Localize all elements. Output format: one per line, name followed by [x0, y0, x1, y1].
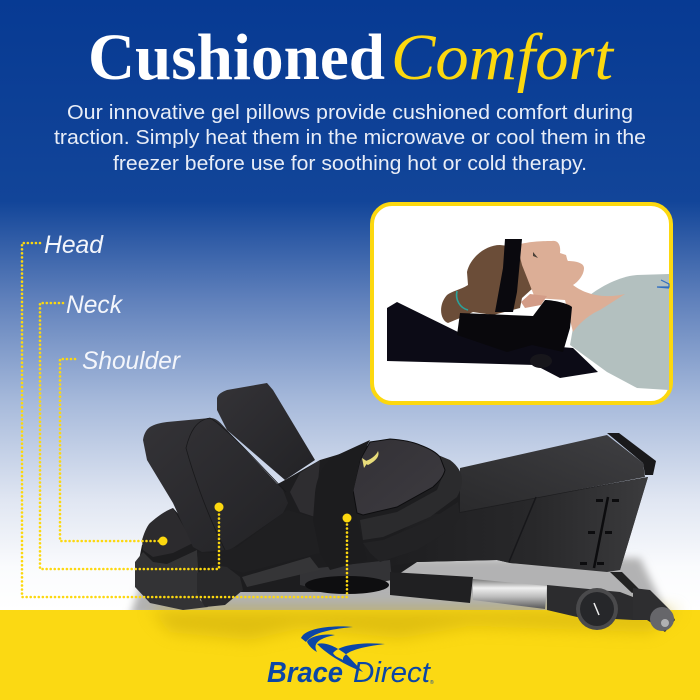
- callout: neck: Neck: [66, 291, 123, 319]
- support strut: [610, 572, 640, 593]
- title: [88, 21, 615, 94]
- pressure gauge: [576, 588, 618, 630]
- description text: Our innovative gel pillows provide cushioned comfort during: [67, 101, 633, 124]
- inset photo panel: [372, 204, 671, 403]
- rail side: [360, 477, 648, 572]
- face and neck: [517, 241, 625, 332]
- shoulder gel pillow: [353, 439, 445, 515]
- photo knob: [530, 354, 552, 368]
- shoulder platform: [360, 455, 462, 540]
- eye: [533, 252, 538, 258]
- pillow logo: [362, 451, 379, 468]
- rail panel edge: [509, 497, 536, 562]
- pump head: [633, 588, 675, 632]
- callout: neck: [40, 291, 224, 569]
- pump handle: [390, 572, 473, 603]
- title: Comfort: [391, 21, 615, 94]
- rail slots: [580, 497, 619, 568]
- velcro strap: [313, 440, 370, 570]
- chrome tube: [473, 579, 547, 609]
- callout: shoulder: [60, 347, 182, 546]
- shirt: [570, 274, 669, 390]
- small head pillow: [142, 508, 193, 557]
- logo swooshes: [301, 626, 385, 672]
- callout: shoulder: Shoulder: [82, 347, 182, 375]
- wedge device in photo: [387, 302, 598, 378]
- logo: Brace Direct: ®: [430, 679, 434, 686]
- pump body: [547, 585, 633, 620]
- lower beam: [242, 557, 320, 587]
- hair: [441, 245, 533, 323]
- rotation disc: [305, 576, 389, 594]
- callout: head: [22, 231, 352, 597]
- device silhouette: [135, 445, 648, 600]
- head strap: [495, 239, 522, 312]
- description text: traction. Simply heat them in the microwave or cool them in the: [54, 126, 646, 149]
- title: Cushioned: [88, 21, 385, 94]
- end cap: [607, 433, 656, 475]
- rail top: [460, 435, 645, 512]
- rotating base: [300, 560, 392, 592]
- front pillow: [143, 418, 288, 552]
- shirt logo: [657, 280, 669, 288]
- floor shadow: [130, 558, 668, 616]
- logo: Brace Direct: [267, 626, 434, 689]
- callout: head: Head: [44, 231, 104, 259]
- ear: [521, 294, 547, 308]
- traction device: [135, 383, 675, 632]
- end valve: [650, 607, 674, 631]
- central beam: [197, 510, 320, 585]
- description text: [54, 101, 646, 175]
- logo: Brace Direct: Direct: [353, 657, 432, 689]
- adjustment knob: [197, 565, 243, 607]
- head and neck cushions: [457, 300, 572, 352]
- back pillow: [217, 383, 315, 480]
- pillow seam: [186, 418, 286, 550]
- pump: [390, 572, 675, 632]
- description text: freezer before use for soothing hot or cold therapy.: [113, 152, 587, 175]
- hair band: [457, 291, 468, 310]
- yellow floor band: [0, 610, 700, 700]
- neck gel pillow: [290, 460, 320, 517]
- lower platform: [363, 502, 460, 562]
- logo: Brace Direct: Brace: [267, 657, 343, 689]
- base plate: [135, 550, 208, 610]
